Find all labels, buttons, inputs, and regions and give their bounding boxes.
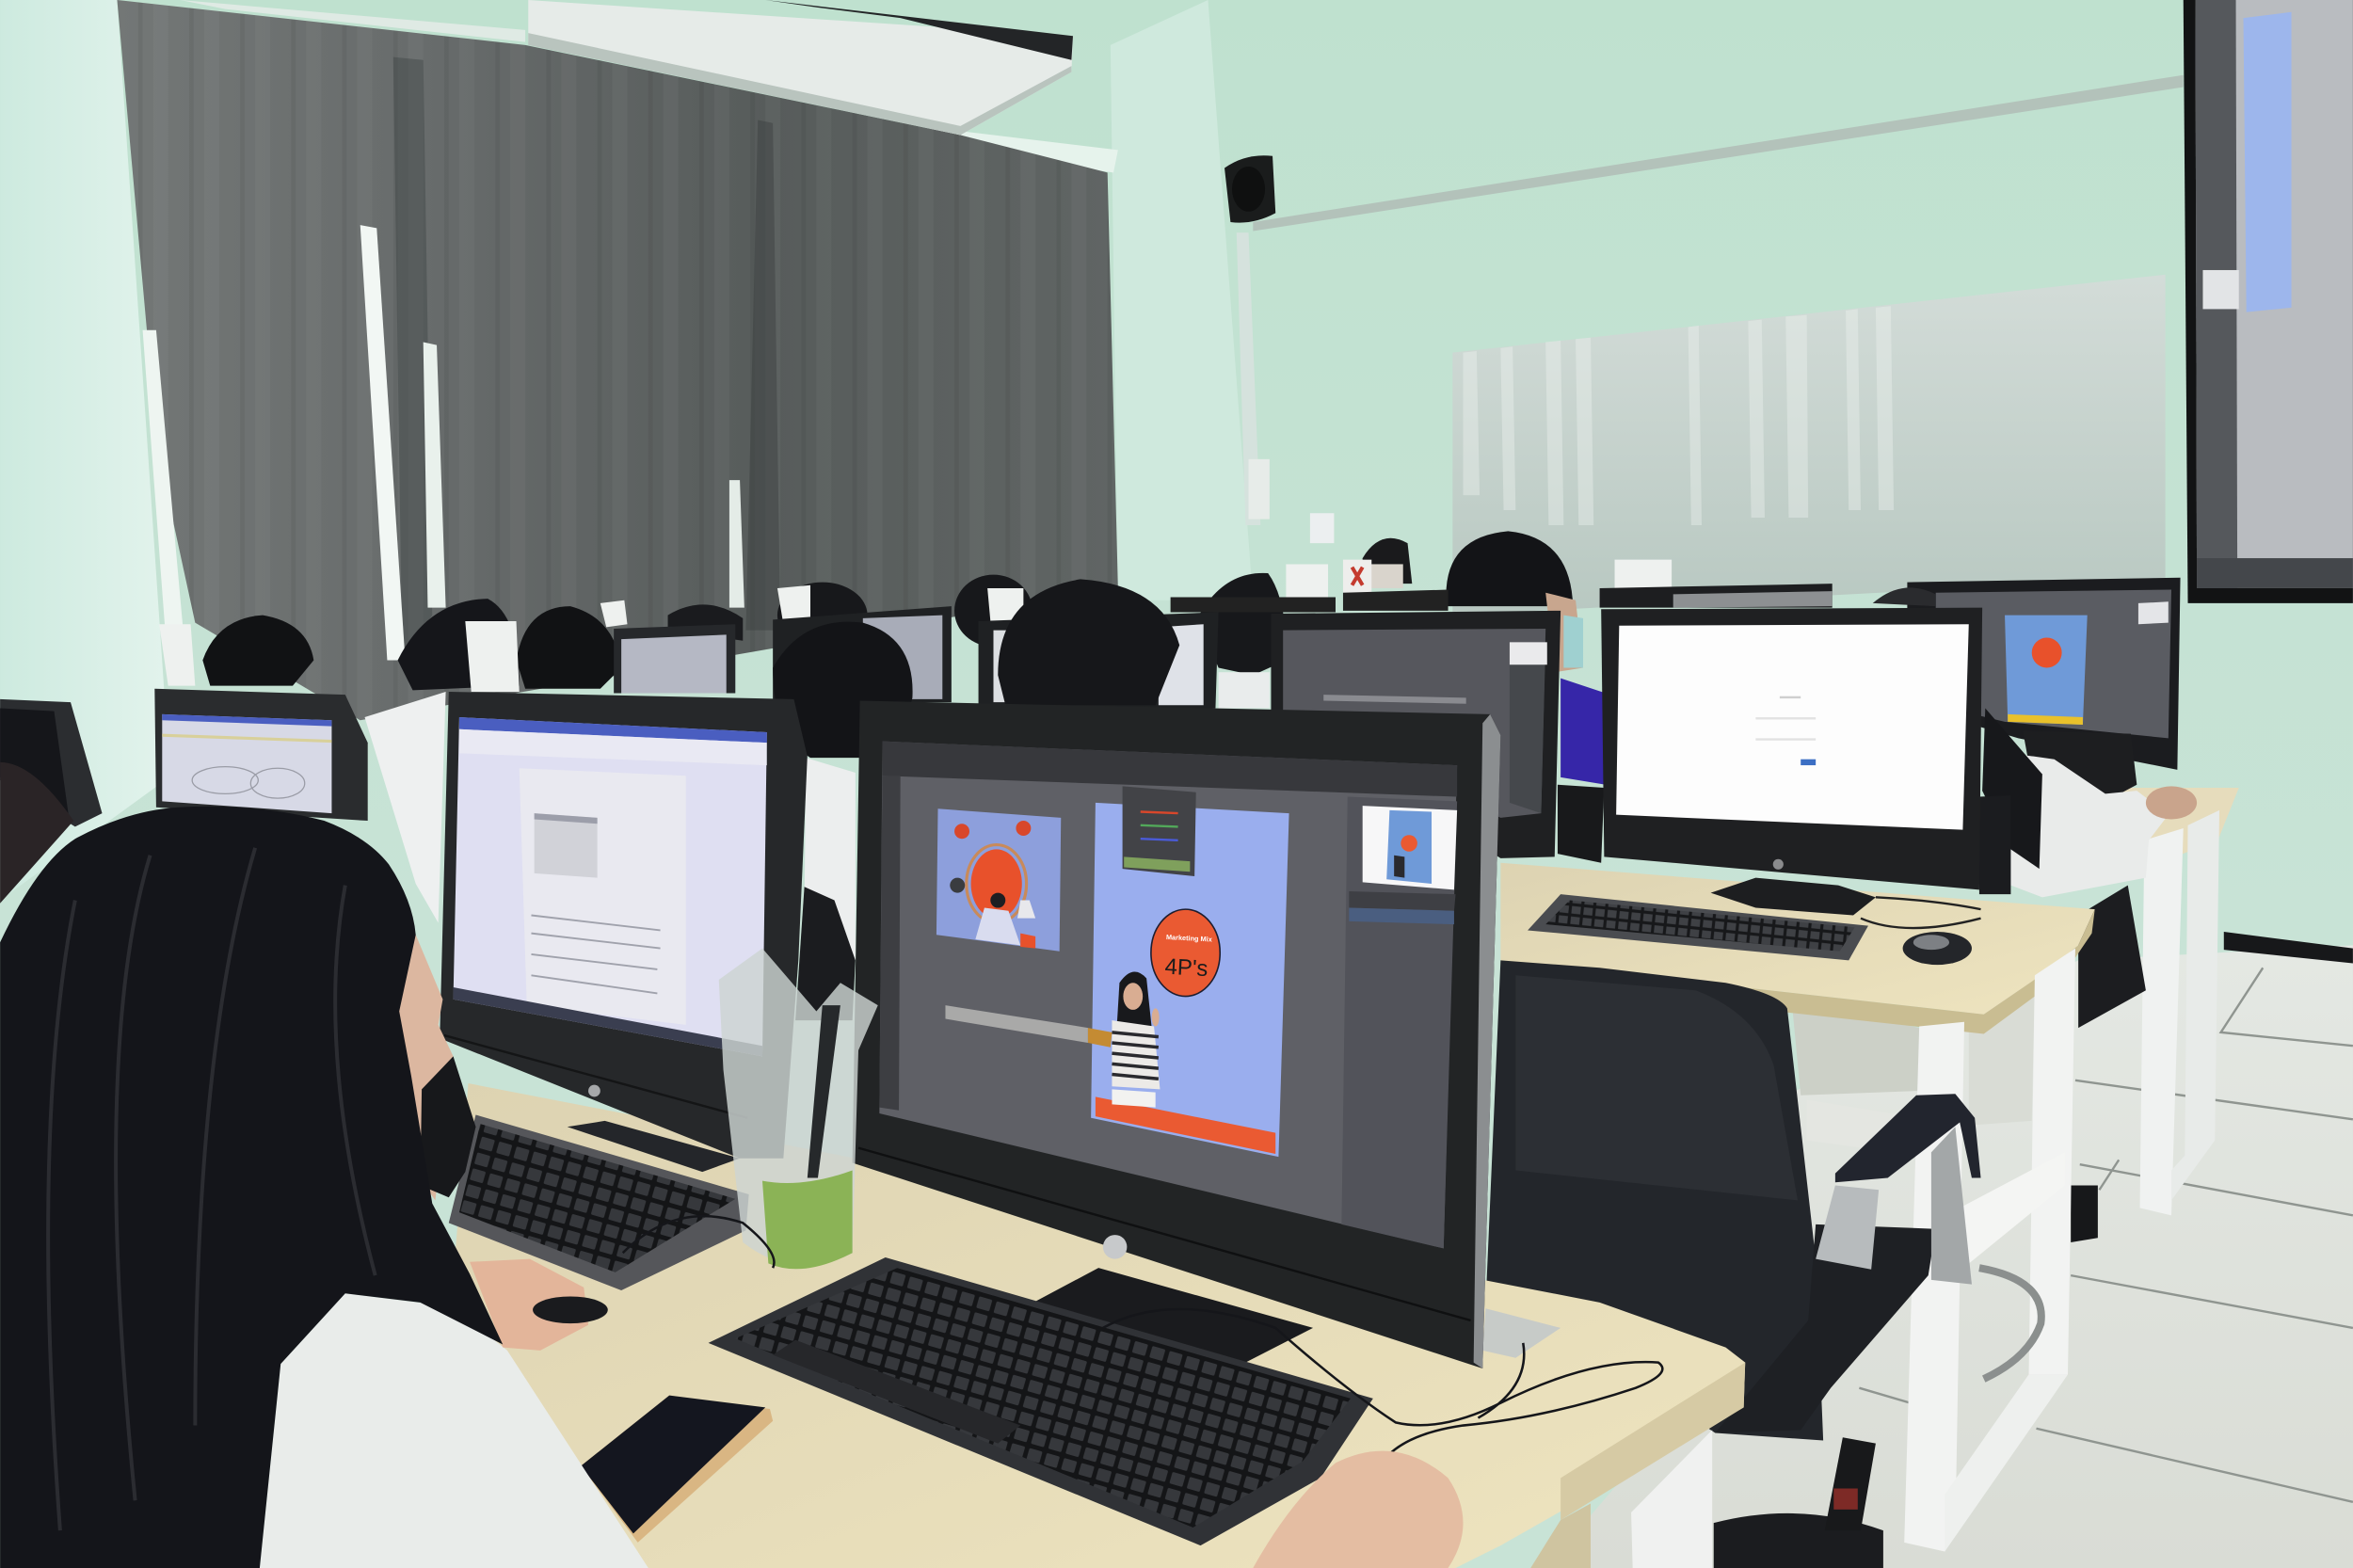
poster title: 4P's — [1164, 954, 1209, 982]
chair chrome right — [1931, 1127, 1972, 1285]
plastic cup — [719, 949, 878, 1269]
chair wheel base — [1714, 1513, 1883, 1568]
cables front — [623, 1216, 1662, 1455]
red x card — [1343, 560, 1371, 593]
floor — [1545, 945, 2353, 1568]
second left monitor — [154, 689, 368, 821]
left monitor stand — [568, 1121, 740, 1172]
conduit — [1237, 232, 1260, 525]
woman in foreground — [0, 807, 648, 1568]
wall rail — [1253, 75, 2184, 232]
phone — [581, 1396, 773, 1543]
HP logo — [1103, 1235, 1127, 1259]
desk legs — [1904, 1022, 1964, 1551]
front right hand — [1253, 1451, 1464, 1568]
wall speaker — [1225, 155, 1275, 223]
projector screen — [2184, 0, 2353, 603]
main monitor — [853, 701, 1500, 1368]
middle monitor — [1271, 611, 1561, 858]
right keyboard — [1528, 894, 1868, 960]
preview thumbnail — [1363, 806, 1457, 889]
far right desk — [2101, 788, 2239, 1215]
poster model — [1112, 972, 1160, 1108]
right desk — [1500, 863, 2095, 1551]
hair — [0, 807, 503, 1568]
artboard: poster — [1091, 803, 1289, 1157]
back row monitors — [614, 584, 1833, 708]
left hand — [470, 1259, 588, 1351]
mouse — [1903, 932, 1972, 965]
chairs behind right monitor — [1558, 785, 2010, 894]
front desk leg — [1631, 1430, 1712, 1568]
main keyboard — [709, 1257, 1373, 1545]
chair chrome left — [1816, 1185, 1879, 1270]
far student chair — [2071, 886, 2146, 1242]
foreground desk — [450, 1083, 1745, 1568]
mask — [420, 1056, 475, 1197]
air conditioner — [528, 0, 1073, 135]
center student head — [998, 579, 1179, 705]
main monitor screen — [879, 742, 1457, 1248]
under-desk panels — [1792, 1000, 1919, 1096]
dark haired student behind glass — [773, 622, 913, 1020]
skirting — [2224, 932, 2353, 964]
far left monitor — [0, 699, 103, 826]
chair armrest — [1835, 1094, 1981, 1182]
black office chair — [1485, 960, 1981, 1568]
left monitor — [440, 692, 808, 1159]
floor tile lines — [1859, 968, 2353, 1502]
poster heading: Marketing Mix — [1166, 933, 1213, 944]
guide bar — [945, 1005, 1088, 1043]
left wall — [0, 0, 165, 901]
right student — [1873, 587, 2197, 897]
ceiling strip — [180, 0, 525, 42]
white shirt — [260, 1293, 648, 1568]
left keyboard — [449, 1115, 749, 1290]
chair seat — [1715, 1224, 1936, 1433]
right monitor stand — [1711, 878, 1876, 915]
cables — [1861, 897, 1981, 928]
back students — [202, 531, 1606, 922]
hair strands — [48, 848, 376, 1530]
ceiling beam — [931, 128, 1118, 172]
outlets — [1249, 459, 1270, 520]
hose — [1979, 1268, 2041, 1379]
whiteboard — [1452, 275, 2166, 616]
chair lever — [1825, 1437, 1876, 1530]
right monitor — [1601, 608, 1982, 889]
back paper dividers — [159, 560, 1672, 692]
curtain — [117, 0, 1118, 720]
back right monitor — [1907, 578, 2181, 770]
main monitor stand — [1028, 1268, 1313, 1363]
window pillar wall — [1111, 0, 1253, 600]
mouse — [533, 1296, 608, 1323]
face — [393, 935, 454, 1200]
neighbour hair at far left — [0, 762, 73, 904]
artboard: thumbnail — [936, 808, 1061, 952]
window light slits — [360, 225, 406, 660]
color panel — [1123, 786, 1196, 876]
cable port — [1482, 1308, 1561, 1358]
